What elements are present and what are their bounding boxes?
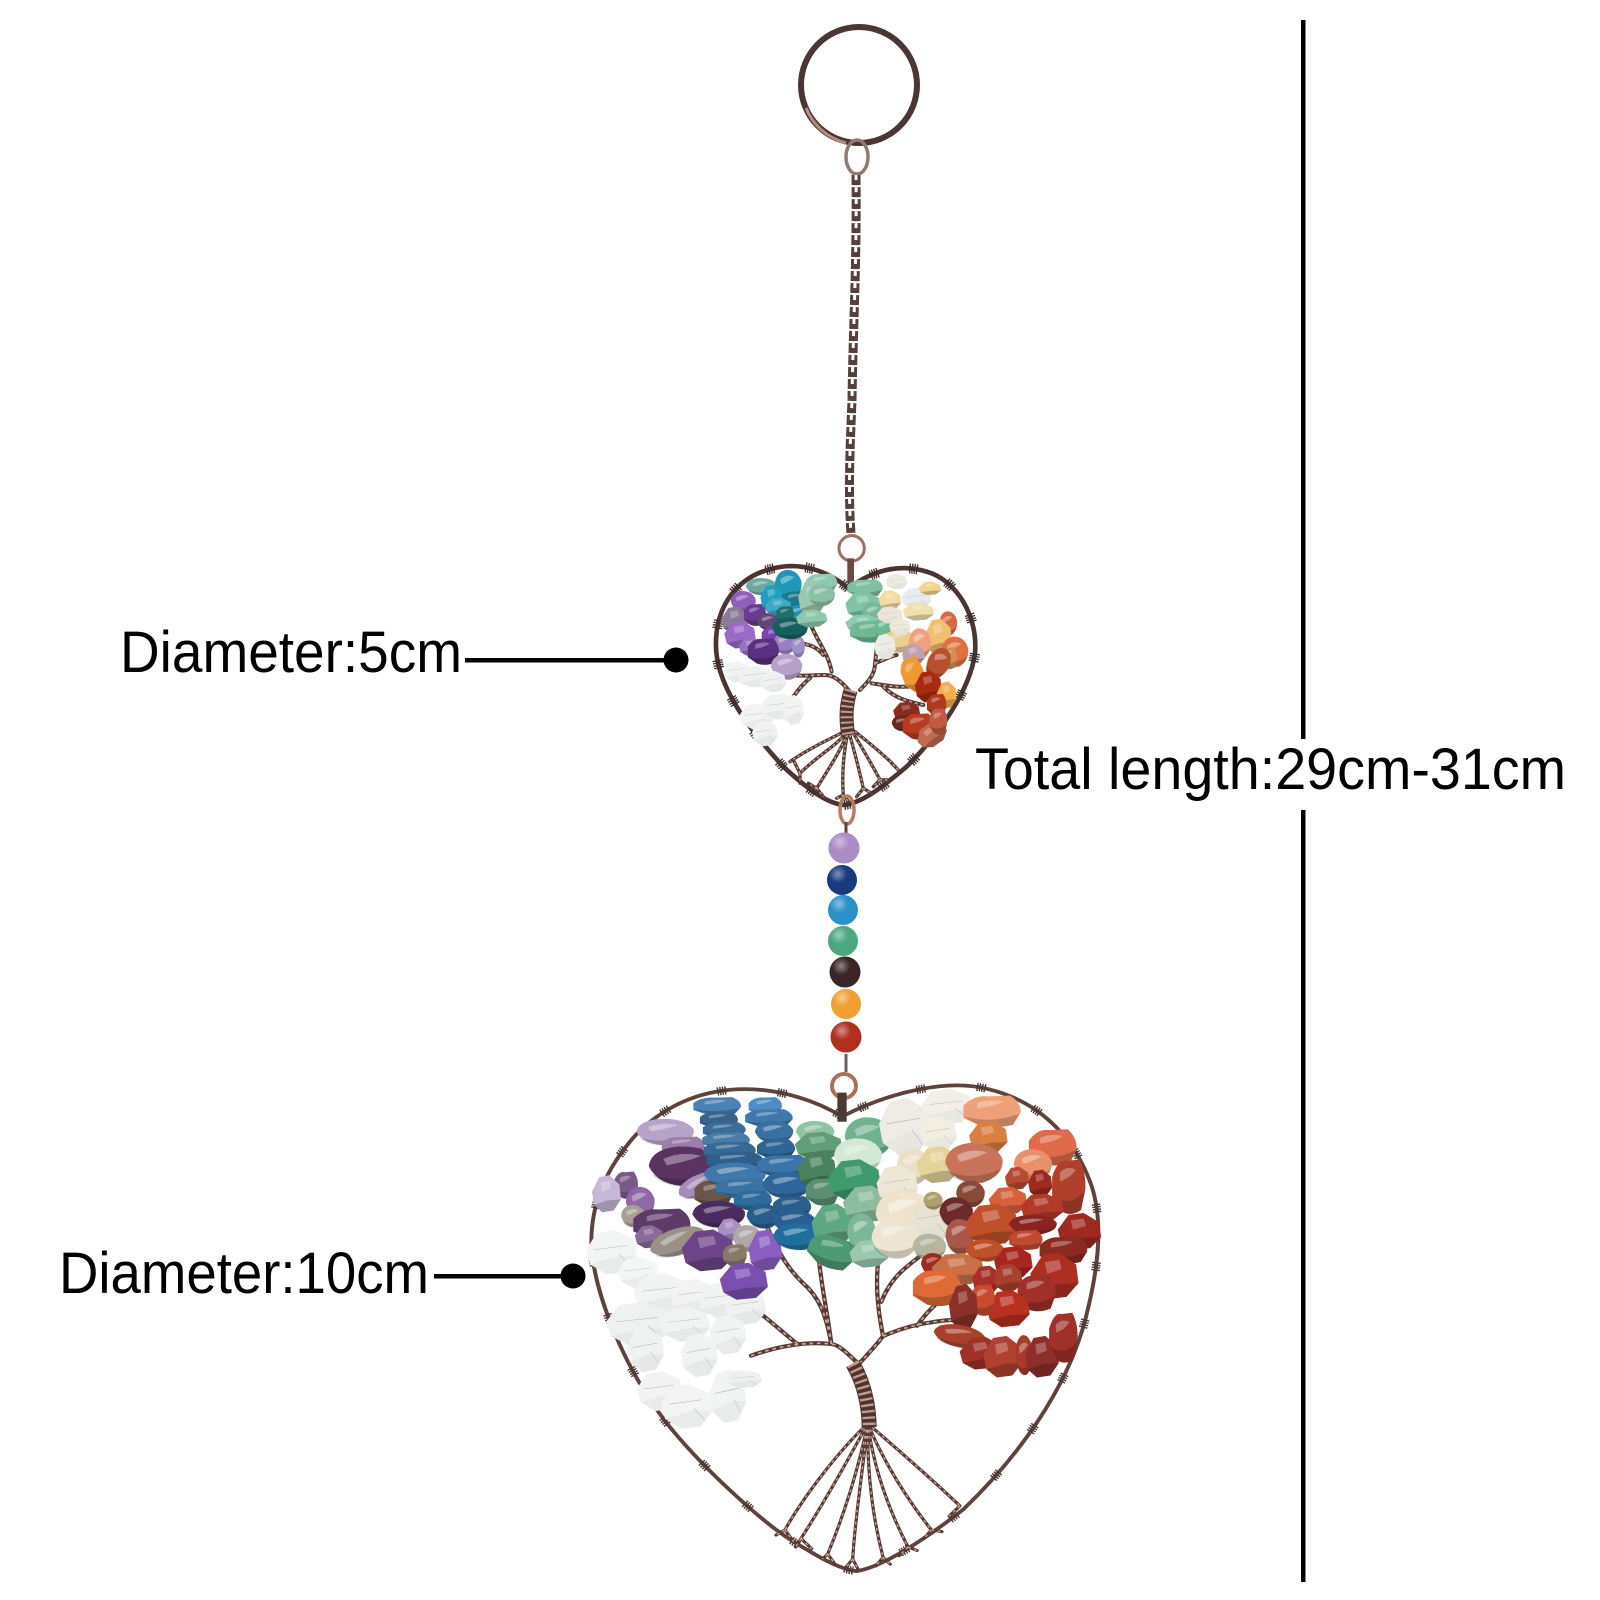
large tree roots (776, 1424, 960, 1569)
callout: diameter 5cm (120, 620, 688, 685)
aventurine green chips (795, 1117, 893, 1275)
small tree roots (790, 730, 898, 802)
connector ring (839, 536, 864, 583)
small heart frame (716, 566, 975, 805)
small clear quartz chips (724, 661, 804, 746)
small link below small heart (840, 796, 854, 834)
large heart frame (591, 1085, 1098, 1571)
large heart wire wraps (591, 1085, 1098, 1571)
citrine and quartz chips (871, 1088, 973, 1261)
connector bail (829, 1093, 855, 1122)
small red chips (892, 702, 951, 753)
amethyst chips (592, 1119, 782, 1300)
kyanite blue chips (693, 1097, 821, 1250)
dimension: total length: Total length:29cm-31cm (975, 737, 1566, 802)
carnelian and red jasper chips (913, 1095, 1101, 1378)
small citrine chips (874, 574, 941, 660)
small purple chips (721, 591, 805, 680)
large heart ornament (586, 1085, 1101, 1571)
dimension: total length (975, 20, 1566, 1582)
key ring (801, 27, 917, 174)
clear quartz chips (586, 1230, 767, 1429)
small teal chips (746, 570, 809, 639)
small heart ornament (716, 536, 975, 805)
large tree branches (751, 1228, 958, 1364)
small green chips (796, 574, 892, 643)
callout: diameter 5cm: Diameter:5cm (120, 620, 462, 685)
chain (849, 175, 856, 534)
small tree trunk (847, 690, 851, 735)
small heart wire wraps (716, 566, 975, 805)
small tree branches (790, 627, 923, 705)
link above large heart (832, 1054, 856, 1115)
callout: diameter 10cm: Diameter:10cm (59, 1241, 429, 1306)
chakra beads (827, 832, 862, 1052)
small orange chips (897, 611, 968, 716)
large tree trunk (853, 1364, 869, 1427)
